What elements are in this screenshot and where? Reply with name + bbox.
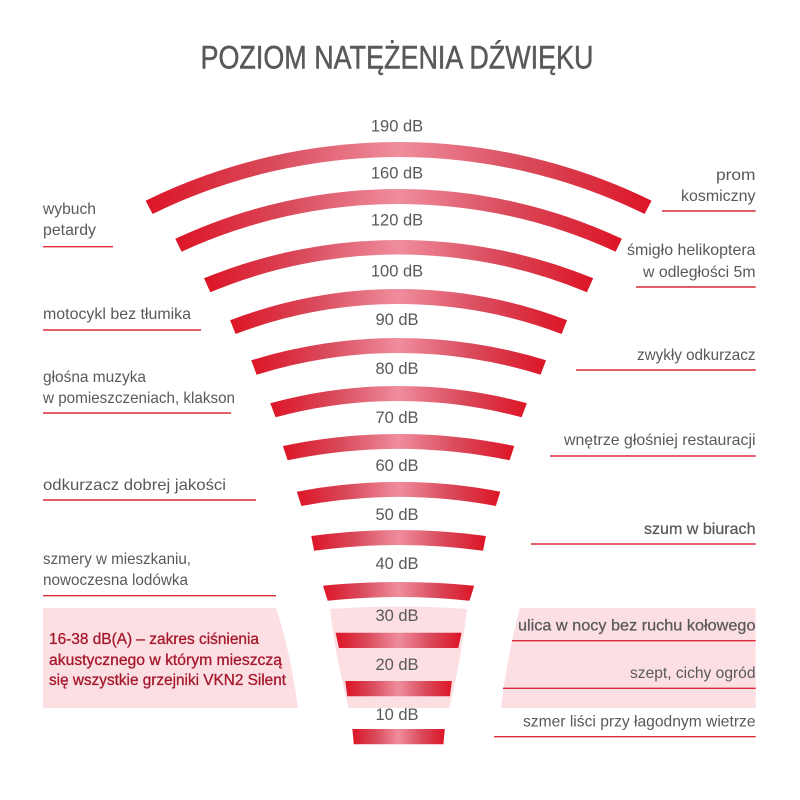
arc: 100 dB [230, 289, 567, 334]
arc stack: decibel scale [146, 142, 652, 744]
right annotation: prom kosmiczny: kosmiczny [681, 188, 756, 205]
arc: 10 dB [352, 729, 445, 744]
left annotation: wybuch petardy: wybuch [42, 201, 96, 218]
left annotation: głośna muzyka [42, 369, 235, 413]
arc: 80 dB [270, 386, 527, 417]
left annotation: głośna muzyka: w pomieszczeniach, klakson [42, 390, 235, 407]
left annotation: szmery w mieszkaniu: nowoczesna lodówka [43, 572, 188, 589]
left annotation: wybuch petardy: petardy [43, 222, 96, 239]
label: 120 dB: 120 dB [371, 212, 423, 230]
label: 80 dB: 80 dB [375, 360, 419, 378]
decibel labels [371, 118, 423, 724]
left annotation: wybuch petardy [42, 201, 113, 247]
label: 190 dB: 190 dB [371, 118, 423, 136]
right annotation: wnętrze restauracji: wnętrze głośniej restauracji [563, 432, 756, 449]
arc: 190 dB [146, 142, 652, 214]
arc: 50 dB [311, 530, 486, 551]
panel: pink highlight centre [330, 606, 467, 708]
callout: VKN2 Silent range: akustycznego w którym mieszczą [49, 652, 282, 669]
arc: 40 dB [323, 582, 474, 601]
right annotation: szum w biurach: szum w biurach [644, 521, 756, 538]
arc: 160 dB [175, 189, 622, 252]
arc: 60 dB [297, 482, 500, 506]
arc: 70 dB [283, 434, 514, 460]
label: 30 dB: 30 dB [375, 607, 419, 625]
label: 40 dB: 40 dB [375, 555, 419, 573]
right annotation: prom kosmiczny: prom [716, 167, 756, 184]
left annotation: głośna muzyka: głośna muzyka [43, 369, 146, 386]
callout: VKN2 Silent range [49, 631, 287, 689]
label: 90 dB: 90 dB [375, 311, 419, 329]
label: 70 dB: 70 dB [375, 409, 419, 427]
callout: VKN2 Silent range: się wszystkie grzejniki VKN2 Silent [49, 672, 287, 689]
label: 20 dB: 20 dB [375, 656, 419, 674]
title: POZIOM NATĘŻENIA DŹWIĘKU [200, 40, 594, 76]
left annotation: motocykl: motocykl bez tłumika [43, 306, 191, 323]
right annotation: szmer liści: szmer liści przy łagodnym wietrze [523, 714, 756, 730]
panel: pink highlight right [501, 608, 756, 708]
label: 160 dB: 160 dB [371, 164, 423, 182]
right annotation: zwykły odkurzacz: zwykły odkurzacz [637, 347, 756, 364]
right annotation: prom kosmiczny [662, 167, 756, 211]
callout: VKN2 Silent range: 16-38 dB(A) – zakres ciśnienia [49, 631, 259, 648]
label: 60 dB: 60 dB [375, 457, 419, 475]
label: 100 dB: 100 dB [371, 262, 423, 280]
right annotation: śmigło helikoptera: śmigło helikoptera [627, 242, 756, 259]
left annotation: szmery w mieszkaniu [43, 551, 276, 596]
left annotation: odkurzacz dobrej jakości: odkurzacz dobrej jakości [43, 477, 226, 494]
panel: pink highlight left [43, 608, 298, 708]
left annotation: szmery w mieszkaniu: szmery w mieszkaniu, [43, 551, 191, 568]
right annotation: śmigło helikoptera [627, 242, 756, 287]
label: 10 dB: 10 dB [375, 706, 419, 724]
right annotation: śmigło helikoptera: w odległości 5m [642, 264, 756, 281]
arc: 120 dB [204, 240, 593, 292]
label: 50 dB: 50 dB [375, 506, 419, 524]
right annotation: szept: szept, cichy ogród [630, 665, 756, 682]
arc: 20 dB [345, 681, 452, 696]
right annotation: ulica w nocy: ulica w nocy bez ruchu kołowego [518, 618, 756, 634]
arc: 90 dB [251, 338, 546, 375]
arc: 30 dB [336, 633, 462, 648]
